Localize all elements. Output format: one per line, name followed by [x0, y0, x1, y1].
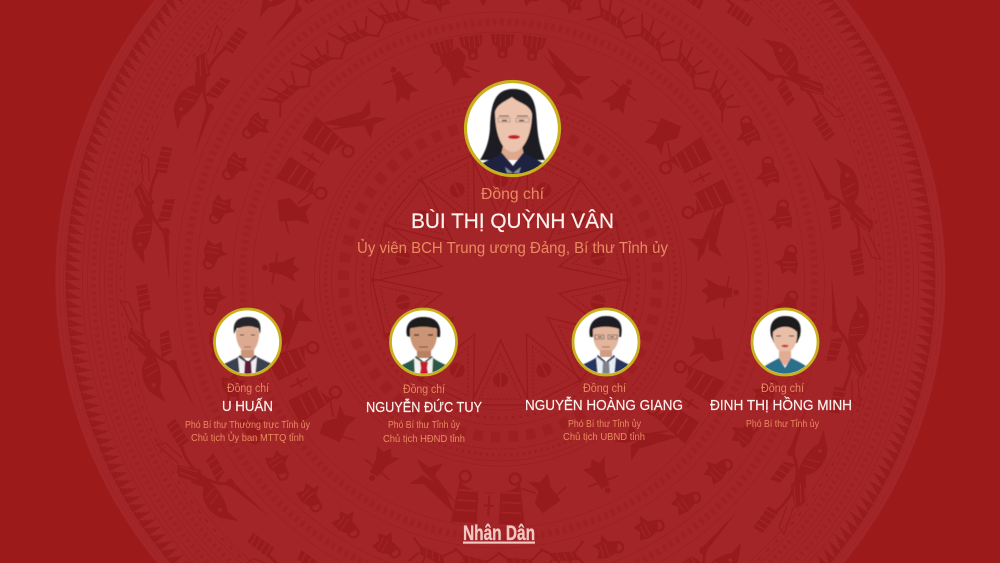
role: Ủy viên BCH Trung ương Đảng, Bí thư Tỉnh ủy: Ủy viên BCH Trung ương Đảng, Bí thư Tỉnh ủy: [357, 239, 668, 257]
role lines: Phó Bí thư Thường trực Tỉnh ủy: [185, 419, 311, 431]
name: Nguyễn Hoàng Giang: NGUYỄN HOÀNG GIANG: [525, 397, 683, 414]
role lines: Chủ tịch HĐND tỉnh: [383, 433, 465, 445]
portrait: Nguyễn Đức Tuy: [390, 309, 456, 378]
name: Đinh Thị Hồng Minh: ĐINH THỊ HỒNG MINH: [710, 396, 852, 414]
role lines: [185, 419, 311, 444]
portrait: U Huấn: [214, 309, 280, 378]
label: Đồng chí: Đồng chí: [481, 186, 545, 203]
role line: Phó Bí thư Tỉnh ủy: [746, 418, 820, 430]
panel: Nguyễn Hoàng Giang: [525, 309, 683, 443]
logo: Nhân Dân: Nhân Dân: [463, 522, 535, 545]
panel: Đinh Thị Hồng Minh: [710, 309, 852, 430]
panel: Bùi Thị Quỳnh Vân: [357, 82, 668, 257]
label: Đồng chí: Đồng chí: [227, 383, 270, 395]
name: Bùi Thị Quỳnh Vân: BÙI THỊ QUỲNH VÂN: [411, 210, 614, 233]
portrait: Nguyễn Hoàng Giang: [573, 309, 639, 378]
panel: U Huấn: [185, 309, 311, 444]
role lines: [563, 418, 645, 443]
role lines: Chủ tịch UBND tỉnh: [563, 431, 645, 443]
panel: Nguyễn Đức Tuy: [366, 309, 482, 445]
portrait: Bùi Thị Quỳnh Vân: [466, 82, 560, 176]
role lines: [383, 419, 465, 445]
label: Đồng chí: Đồng chí: [761, 383, 805, 395]
portrait: Đinh Thị Hồng Minh: [752, 309, 818, 378]
name: U Huấn: U HUẤN: [222, 398, 273, 415]
label: Đồng chí: Đồng chí: [583, 383, 627, 395]
role lines: Phó Bí thư Tỉnh ủy: [568, 418, 642, 430]
role lines: Chủ tịch Ủy ban MTTQ tỉnh: [191, 431, 304, 444]
role lines: Phó Bí thư Tỉnh ủy: [388, 419, 461, 431]
name: Nguyễn Đức Tuy: NGUYỄN ĐỨC TUY: [366, 399, 482, 416]
label: Đồng chí: Đồng chí: [403, 384, 446, 396]
